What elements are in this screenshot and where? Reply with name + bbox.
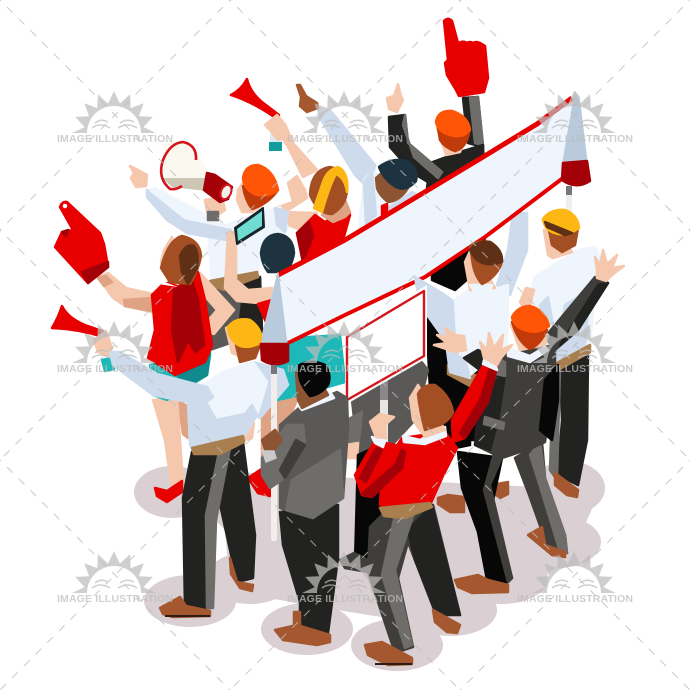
white cuff	[483, 360, 497, 370]
head	[296, 372, 328, 408]
head	[226, 322, 262, 360]
ground shadows	[134, 461, 605, 671]
legs	[355, 445, 382, 562]
red dress	[297, 207, 350, 262]
shoe left	[160, 597, 210, 617]
figure: man in black suit with foam hand	[387, 19, 488, 205]
belt	[555, 345, 590, 370]
belt	[448, 365, 497, 386]
watermark row 1	[57, 91, 633, 145]
belt	[380, 503, 432, 518]
megaphone holding hand	[205, 197, 225, 217]
raised arm	[276, 124, 317, 177]
figure: white shirt man behind banner, upper arm	[425, 213, 527, 450]
right post flag	[563, 92, 587, 163]
pointing hand	[130, 166, 147, 187]
legs	[262, 392, 300, 480]
shoe right	[230, 558, 253, 591]
head	[410, 385, 445, 437]
hand	[346, 443, 358, 458]
left hand	[434, 328, 466, 352]
hand	[262, 430, 282, 449]
shoes	[438, 495, 464, 512]
right post cap	[562, 161, 590, 185]
right pole	[566, 186, 572, 213]
tablet	[235, 208, 264, 244]
belt	[192, 436, 244, 454]
foam finger top	[444, 19, 488, 96]
trousers	[558, 355, 588, 485]
sign pole	[380, 380, 388, 445]
head	[376, 170, 408, 202]
shoe	[340, 553, 368, 572]
teal dress	[268, 335, 345, 402]
watermark left: IMAGE ILLUSTRATION	[57, 363, 173, 375]
hair	[310, 167, 347, 214]
red shoe	[155, 481, 182, 502]
torso	[380, 432, 457, 515]
horn	[231, 79, 279, 119]
figure: man in white shirt, brown hair	[415, 242, 512, 512]
belt	[210, 272, 258, 290]
arm	[318, 110, 375, 190]
shirt	[358, 172, 425, 240]
jacket	[280, 392, 348, 518]
teal underskirt	[150, 355, 210, 400]
small hand	[520, 288, 534, 310]
red shoe	[248, 468, 270, 496]
shoe	[275, 625, 330, 645]
left post cap	[261, 344, 288, 364]
watermark right: IMAGE ILLUSTRATION	[517, 363, 633, 375]
left arm	[110, 352, 213, 405]
black trousers	[445, 345, 512, 440]
torso	[455, 285, 508, 375]
cuff	[262, 448, 276, 462]
black suit torso	[425, 145, 484, 205]
collar	[403, 427, 446, 444]
shoe front	[365, 642, 412, 665]
black suit left arm	[389, 115, 442, 185]
raised arm	[98, 273, 157, 313]
figure: man in white shirt with yellow hat	[94, 319, 288, 617]
watermark centre	[287, 91, 403, 145]
tie	[382, 204, 387, 224]
torso	[188, 362, 267, 450]
megaphone red bell	[204, 173, 232, 202]
fist	[265, 115, 288, 140]
figure: man with navy cap and brown foam hand	[297, 85, 425, 240]
bottom edge	[288, 178, 563, 343]
watermark centre	[287, 321, 403, 375]
figure: woman with tablet, legs	[225, 208, 345, 496]
waist strap	[484, 417, 504, 429]
top edge	[278, 98, 572, 275]
hand	[370, 414, 394, 438]
watermark left	[57, 321, 173, 375]
arm	[262, 425, 305, 488]
watermark centre	[287, 551, 403, 605]
figure: man in dark grey suit	[262, 362, 348, 645]
trousers	[280, 505, 338, 633]
watermark centre: IMAGE ILLUSTRATION	[287, 133, 403, 145]
trousers	[183, 442, 255, 608]
red top	[258, 300, 275, 322]
hand on hip arm	[197, 273, 234, 334]
watermark right: IMAGE ILLUSTRATION	[517, 133, 633, 145]
arm with tablet	[225, 232, 272, 304]
cap head	[261, 234, 294, 272]
head	[465, 247, 495, 290]
dress	[148, 272, 212, 375]
headband	[314, 167, 347, 212]
left post flag	[262, 273, 287, 345]
cuff	[372, 437, 385, 447]
hand on hip	[245, 420, 254, 440]
banner	[261, 92, 590, 541]
left arm	[355, 437, 405, 497]
figure: man in red sweater	[355, 333, 512, 665]
right hand	[595, 250, 624, 281]
shoulder sleeve	[528, 275, 556, 345]
black figure behind	[432, 225, 490, 290]
brown foam hand	[297, 85, 318, 112]
figure: man with yellow hat at right	[520, 210, 602, 497]
trousers	[368, 505, 460, 653]
back leg	[515, 442, 567, 553]
face and hair	[161, 237, 178, 284]
megaphone ring	[161, 142, 196, 189]
right arm	[250, 362, 288, 418]
watermark right	[517, 551, 633, 605]
raised right arm	[545, 277, 608, 350]
watermark right: IMAGE ILLUSTRATION	[517, 593, 633, 605]
front leg	[153, 398, 183, 490]
horn left	[52, 306, 105, 337]
hand and bottle	[102, 358, 114, 371]
back shoe	[528, 527, 565, 557]
watermark right	[517, 321, 633, 375]
raised hand	[480, 333, 512, 365]
grey suit behind sign	[352, 360, 428, 455]
torso	[475, 345, 555, 458]
head	[511, 315, 548, 350]
front leg	[458, 452, 512, 585]
head	[237, 178, 262, 212]
sign and man behind it	[340, 285, 428, 572]
raised hand	[387, 84, 403, 112]
raised arm	[452, 362, 497, 442]
pointing arm	[147, 190, 227, 240]
black suit right arm	[463, 97, 483, 147]
watermark centre: IMAGE ILLUSTRATION	[287, 593, 403, 605]
megaphone cone	[163, 141, 208, 190]
foam finger	[55, 202, 108, 283]
dark trousers	[200, 277, 262, 350]
figure: man in dark suit, orange hat	[434, 250, 624, 593]
head with orange cap	[437, 128, 465, 155]
shoe	[555, 473, 578, 497]
front shoe	[455, 575, 508, 593]
left sleeve	[464, 350, 505, 377]
head	[544, 230, 572, 258]
watermark left	[57, 551, 173, 605]
shoe back	[433, 610, 460, 633]
cloth	[278, 98, 572, 343]
watermark row 3	[57, 551, 633, 605]
figure: man with megaphone	[130, 141, 288, 350]
watermark right	[517, 91, 633, 145]
figure: woman with yellow headband	[231, 79, 350, 262]
raised hand	[94, 331, 112, 356]
left shirt sleeve	[415, 277, 470, 360]
figure: woman in red dress with foam hand	[55, 202, 234, 502]
left pole	[271, 365, 277, 541]
watermark left	[57, 91, 173, 145]
back shoe	[294, 612, 300, 625]
watermark left: IMAGE ILLUSTRATION	[57, 593, 173, 605]
watermark centre: IMAGE ILLUSTRATION	[287, 363, 403, 375]
watermark row 2	[57, 321, 633, 375]
back leg	[178, 400, 193, 438]
sign board	[345, 285, 427, 405]
shirt	[208, 207, 288, 284]
bottle	[270, 120, 282, 151]
raised arm	[497, 213, 527, 295]
torso	[528, 247, 602, 365]
second arm	[278, 176, 307, 214]
watermark left: IMAGE ILLUSTRATION	[57, 133, 173, 145]
